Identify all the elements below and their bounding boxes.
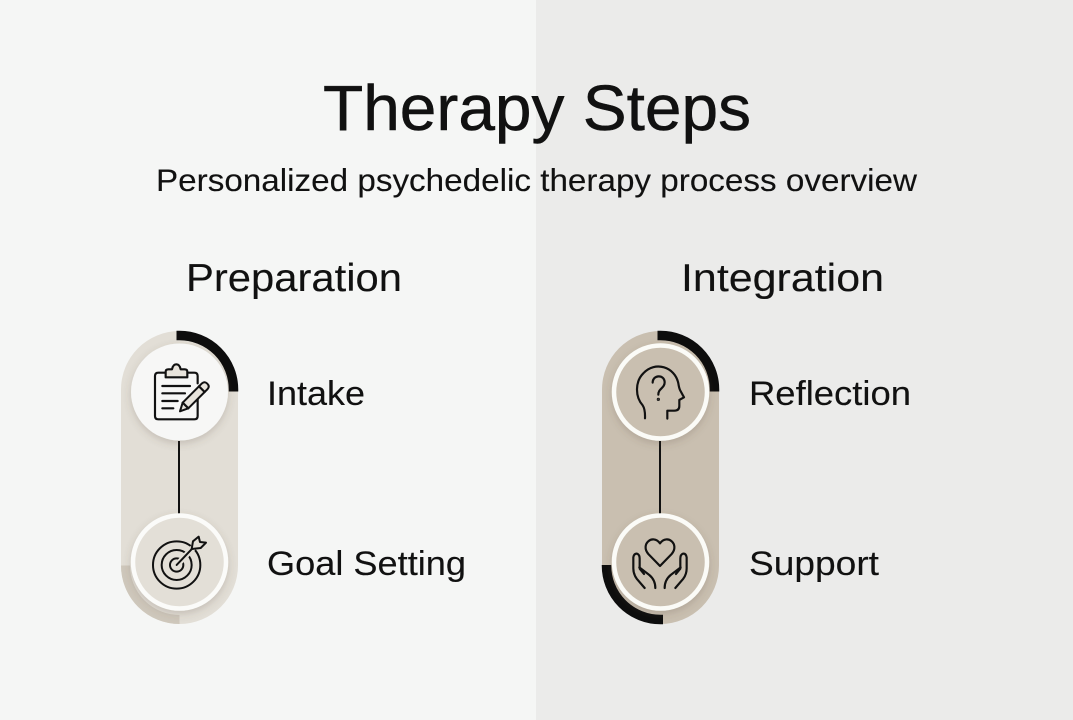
step circle: intake [131, 344, 228, 440]
panel: preparation [121, 257, 466, 624]
subtitle: Personalized psychedelic therapy process overview [156, 162, 917, 198]
bottom-left progress arc [606, 565, 663, 620]
step circle: support [614, 516, 707, 608]
panel: integration [602, 257, 911, 624]
icon: head with question mark [637, 367, 684, 419]
icon: clipboard and pencil [155, 364, 209, 419]
heading: integration: Integration [681, 257, 884, 300]
label: intake: Intake [267, 375, 365, 413]
icon: target with arrow [153, 537, 206, 589]
top-right progress arc [176, 336, 234, 392]
icon: hands holding heart [633, 539, 687, 588]
label: goal setting: Goal Setting [267, 545, 466, 583]
pill track [121, 331, 238, 624]
bottom-left darker arc [126, 566, 180, 620]
top-right progress arc [658, 336, 714, 392]
step circle: reflection [614, 346, 707, 438]
pill track [602, 331, 719, 624]
connector line [659, 441, 661, 514]
connector line [178, 441, 180, 514]
label: support: Support [749, 545, 879, 583]
label: reflection: Reflection [749, 375, 911, 413]
panel: left background [0, 0, 536, 720]
heading: preparation: Preparation [186, 257, 402, 300]
panel: right background [536, 0, 1073, 720]
step circle: goal setting [133, 516, 226, 608]
title: Therapy Steps [323, 72, 751, 144]
